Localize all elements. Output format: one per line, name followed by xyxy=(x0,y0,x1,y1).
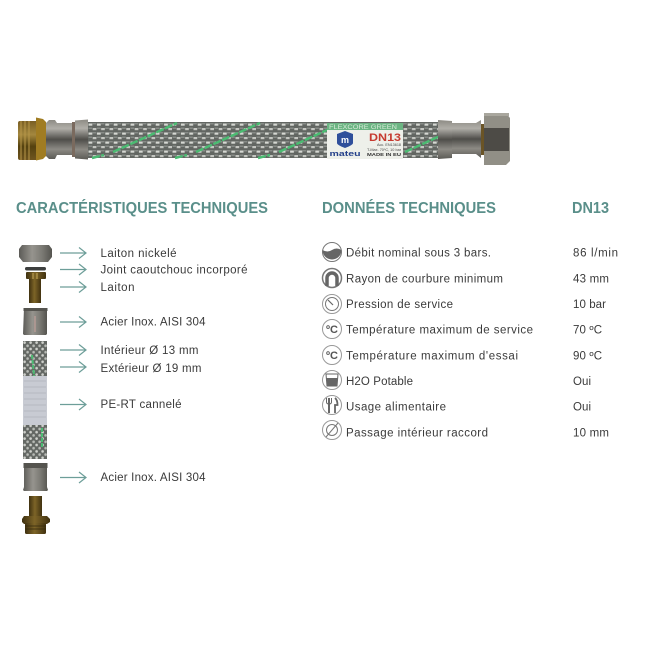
brass threaded nipple xyxy=(22,496,50,534)
icon: température service: ºC xyxy=(326,324,338,336)
component labels: Joint caoutchouc incorporé xyxy=(100,264,248,276)
heading: DN13: DN13 xyxy=(572,200,609,217)
heading: données techniques: DONNÉES TECHNIQUES xyxy=(322,198,496,217)
technical data values: Oui xyxy=(573,402,591,414)
logo mateu: mateu xyxy=(330,149,361,158)
hose product photo xyxy=(18,113,510,165)
arrow: Intérieur xyxy=(60,344,86,356)
technical data values: 86 l/min xyxy=(573,248,618,260)
arrow: PE-RT xyxy=(60,399,86,410)
technical data labels: Pression de service xyxy=(346,299,453,311)
icon: H2O potable xyxy=(322,370,342,390)
right hex nut xyxy=(484,113,510,165)
braided hose xyxy=(88,122,440,158)
component labels: Laiton xyxy=(100,282,134,294)
product label: T-Max. 70ºC, 10 bar xyxy=(367,148,402,152)
product label: Acc. EN13618 xyxy=(377,143,401,147)
upper stainless ferrule xyxy=(23,308,48,335)
component labels: Intérieur Ø 13 mm xyxy=(100,345,198,357)
technical data labels: Passage intérieur raccord xyxy=(346,428,488,440)
technical data values: Oui xyxy=(573,376,591,388)
technical data values: 10 bar xyxy=(573,299,606,311)
component labels: Laiton nickelé xyxy=(100,248,176,260)
arrow: Laiton nickelé xyxy=(60,248,86,258)
technical data values xyxy=(573,248,618,440)
product label: MADE IN EU xyxy=(367,152,401,157)
technical data labels: H2O Potable xyxy=(346,376,413,388)
arrow: Laiton xyxy=(60,282,86,292)
technical data values: 90 ºC xyxy=(573,350,602,362)
product label xyxy=(327,123,403,159)
product label: DN13 xyxy=(369,132,401,144)
icon: température essai xyxy=(322,346,342,364)
icon: température essai: ºC xyxy=(326,350,338,362)
icon: température service xyxy=(322,320,342,338)
technical data values: 70 ºC xyxy=(573,324,602,336)
rubber seal xyxy=(25,267,46,270)
technical data values: 43 mm xyxy=(573,274,609,286)
icon: rayon de courbure xyxy=(322,268,342,288)
product label: FLEXCORE GREEN xyxy=(329,124,397,131)
icon: pression xyxy=(322,294,342,314)
brass insert xyxy=(26,272,46,303)
left threaded brass end xyxy=(18,118,46,160)
component labels: PE-RT cannelé xyxy=(100,399,182,411)
technical data values: 10 mm xyxy=(573,428,609,440)
component labels: Extérieur Ø 19 mm xyxy=(100,363,202,375)
arrow: Extérieur xyxy=(60,362,86,372)
arrow: Acier 1 xyxy=(60,316,86,328)
right steel ferrule xyxy=(438,120,484,159)
icon: usage alimentaire xyxy=(322,396,342,414)
icon: débit xyxy=(322,242,342,262)
logo mateu xyxy=(330,131,361,158)
technical data labels xyxy=(346,248,533,440)
left steel ferrule xyxy=(46,120,88,160)
technical data labels: Température maximum de service xyxy=(346,324,533,336)
nickel nut xyxy=(19,245,52,262)
heading: caractéristiques techniques: CARACTÉRISTIQUES TECHNIQUES xyxy=(16,198,268,217)
logo mateu: m xyxy=(341,135,349,145)
component labels: Acier Inox. AISI 304 xyxy=(100,472,206,484)
technical data labels: Débit nominal sous 3 bars. xyxy=(346,248,491,260)
technical data labels: Rayon de courbure minimum xyxy=(346,274,503,286)
arrow: Joint xyxy=(60,264,86,275)
technical data labels: Température maximum d'essai xyxy=(346,350,518,362)
arrow: Acier 2 xyxy=(60,472,86,483)
exploded view of hose components xyxy=(19,245,52,534)
icon: passage intérieur xyxy=(322,420,342,440)
hose cross-section xyxy=(23,341,47,459)
lower stainless ferrule xyxy=(23,463,48,491)
technical data labels: Usage alimentaire xyxy=(346,402,446,414)
component labels: Acier Inox. AISI 304 xyxy=(100,316,206,328)
component labels xyxy=(100,248,248,484)
